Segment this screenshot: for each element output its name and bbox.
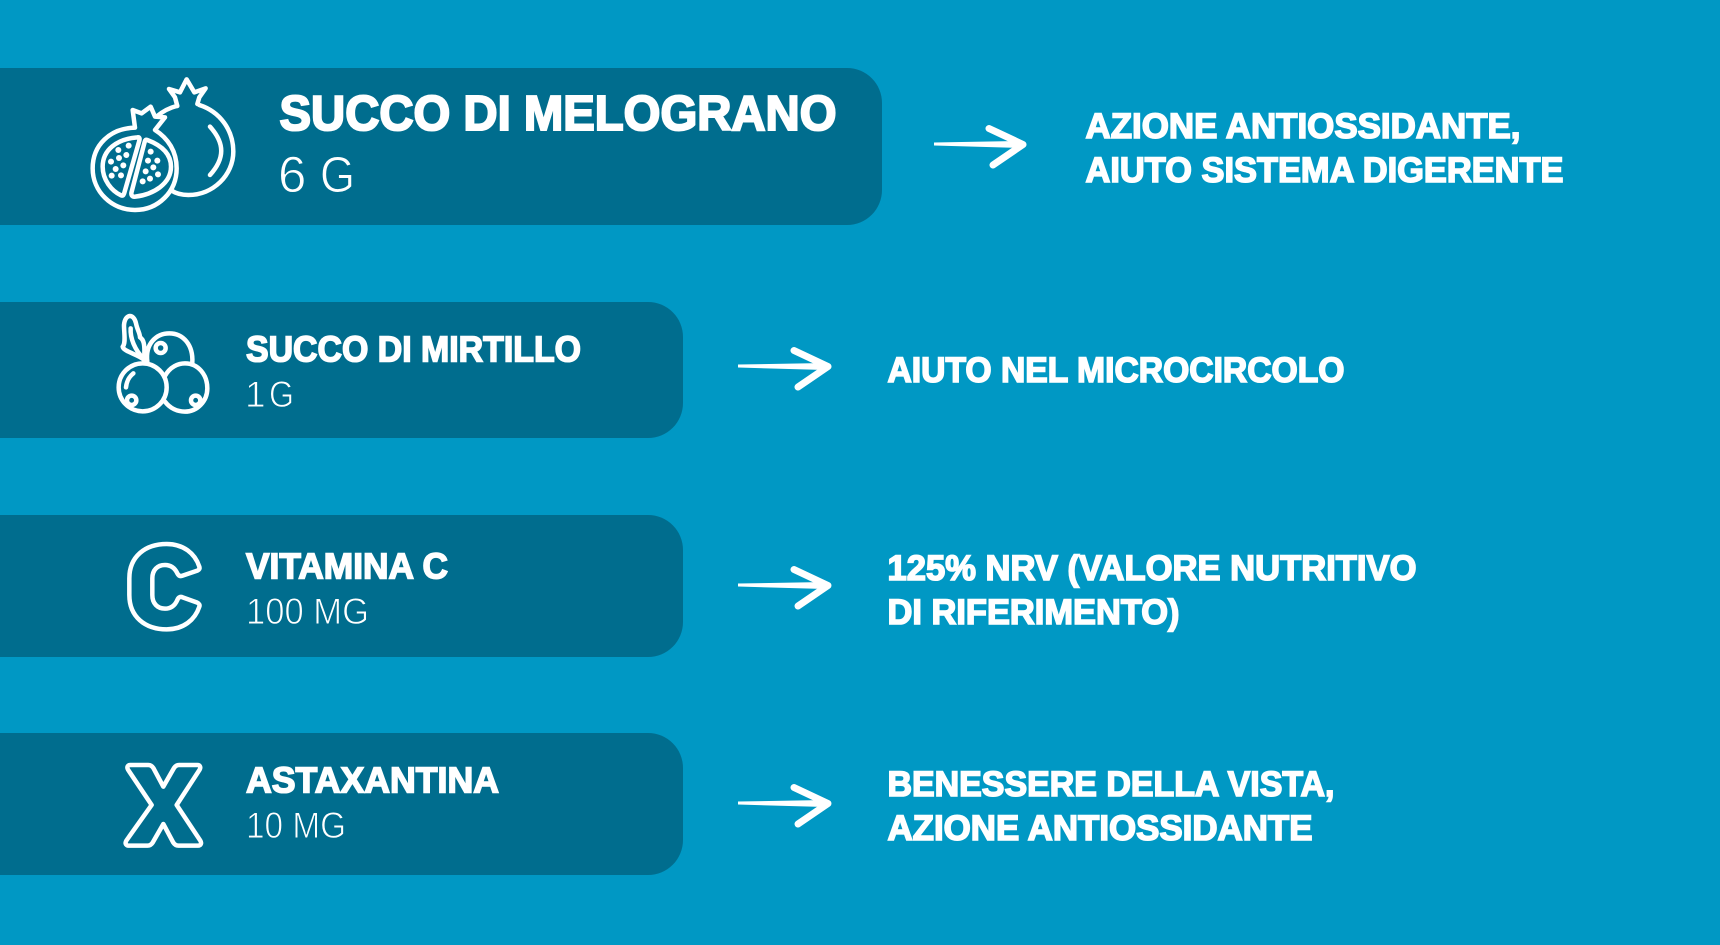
text: benefit mirtillo: AIUTO NEL MICROCIRCOLO (888, 351, 1344, 390)
icon: letter C (129, 544, 200, 629)
icon: letter X (126, 765, 201, 846)
amount: 10 mg: 10 MG (246, 805, 346, 846)
arrow 1 (934, 128, 1023, 165)
heading: succo di melograno: SUCCO DI MELOGRANO (280, 87, 836, 141)
amount: 6 g: G (320, 146, 355, 203)
text: benefit melograno: AIUTO SISTEMA DIGERENTE (1086, 151, 1564, 190)
panel: succo di mirtillo (0, 302, 683, 438)
icon: pomegranate (93, 79, 233, 210)
text: benefit vitamina c: 125% NRV (VALORE NUTRITIVO (888, 549, 1416, 588)
panel: vitamina c (0, 515, 683, 657)
amount: 1 g: 1 (245, 374, 266, 415)
heading: astaxantina: ASTAXANTINA (246, 760, 499, 800)
amount: 1 g: G (269, 374, 294, 415)
heading: vitamina c: VITAMINA C (246, 546, 448, 586)
text: benefit melograno (1086, 107, 1564, 190)
heading: succo di mirtillo: SUCCO DI MIRTILLO (246, 328, 581, 370)
amount: 100 mg: 100 MG (246, 591, 369, 632)
text: benefit melograno: AZIONE ANTIOSSIDANTE, (1086, 107, 1520, 146)
arrow 4 (738, 788, 828, 824)
arrow 3 (738, 570, 828, 606)
arrow 2 (738, 350, 828, 387)
text: benefit vitamina c: DI RIFERIMENTO) (888, 593, 1180, 632)
panel: astaxantina (0, 733, 683, 875)
text: benefit vitamina c (888, 549, 1416, 632)
text: benefit astaxantina: AZIONE ANTIOSSIDANTE (888, 809, 1312, 848)
icon: blueberries (119, 316, 207, 412)
panel: succo di melograno (0, 68, 882, 225)
text: benefit astaxantina: BENESSERE DELLA VISTA, (888, 765, 1334, 804)
amount: 6 g: 6 (278, 146, 306, 203)
text: benefit astaxantina (888, 765, 1334, 848)
